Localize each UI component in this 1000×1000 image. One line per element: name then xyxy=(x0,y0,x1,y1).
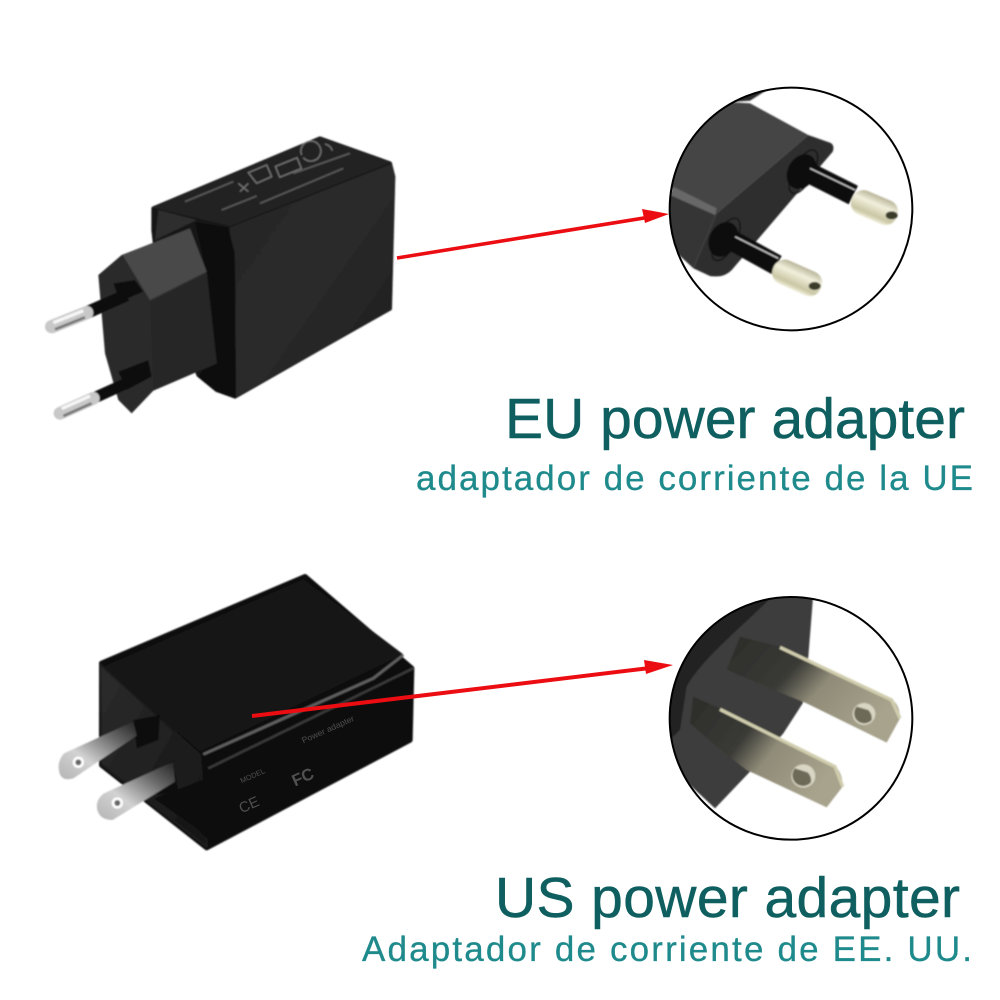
US charger photo: CE xyxy=(237,794,262,817)
EU plug detail circle xyxy=(660,87,912,330)
EU red arrow xyxy=(397,209,669,258)
US plug detail circle xyxy=(667,593,912,840)
US heading: US power adapter xyxy=(495,866,960,930)
US charger photo: FC xyxy=(289,764,317,790)
EU heading: EU power adapter xyxy=(505,387,965,451)
US charger photo: Power adapter xyxy=(300,713,356,745)
US Spanish subtitle: Adaptador de corriente de EE. UU. xyxy=(362,930,972,969)
US charger photo xyxy=(59,577,413,848)
EU charger photo xyxy=(52,137,395,416)
EU Spanish subtitle: adaptador de corriente de la UE xyxy=(416,459,973,498)
US red arrow xyxy=(252,660,673,716)
US charger photo: MODEL xyxy=(239,766,266,785)
